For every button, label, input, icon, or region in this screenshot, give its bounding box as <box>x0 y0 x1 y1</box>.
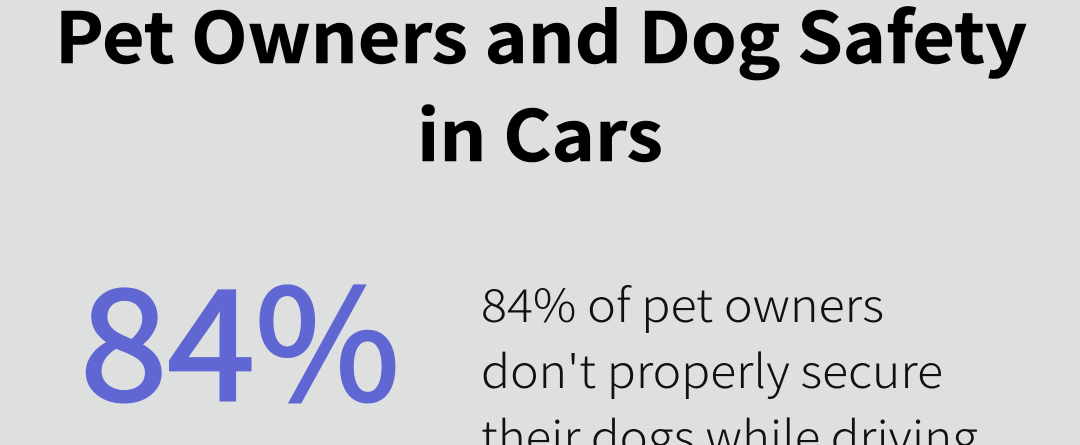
big statistic: 84%: 84% <box>80 224 400 445</box>
description text: don't properly secure <box>481 336 943 402</box>
description text <box>481 270 978 445</box>
title: in Cars <box>417 81 663 182</box>
title <box>55 0 1027 182</box>
description text: 84% of pet owners <box>481 270 884 336</box>
